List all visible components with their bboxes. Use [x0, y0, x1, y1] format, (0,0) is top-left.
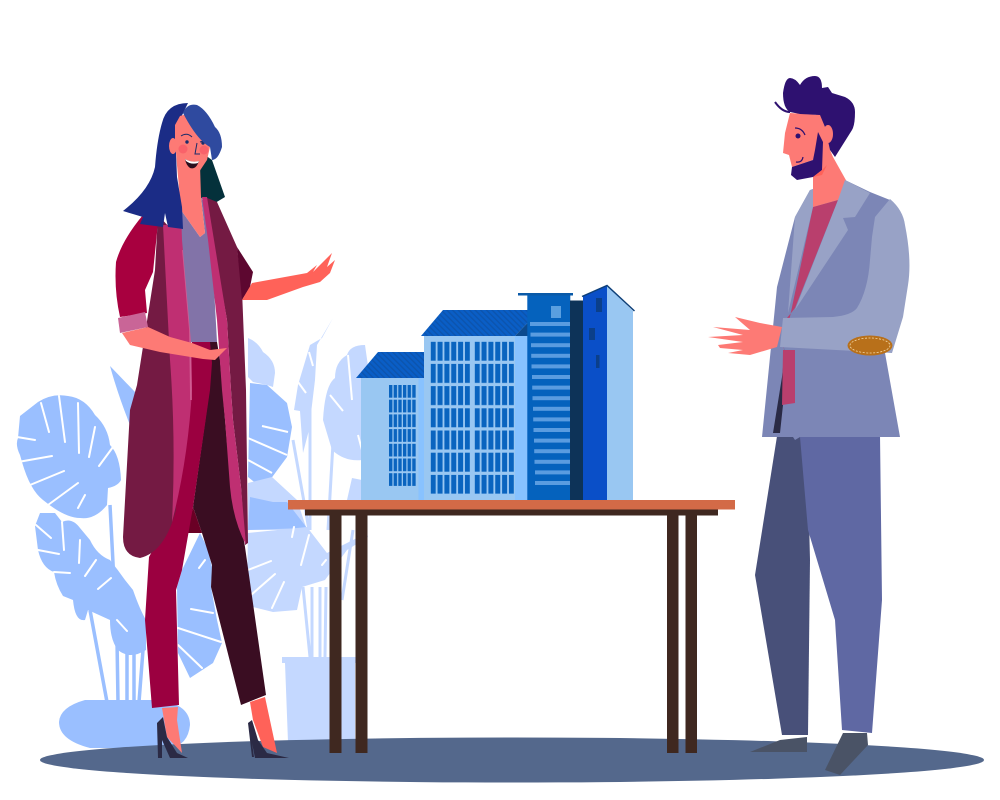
man right trouser leg	[800, 435, 882, 733]
table underside	[305, 509, 718, 516]
man left trouser leg	[755, 430, 810, 735]
plant pot: right	[282, 657, 356, 742]
middle building	[421, 310, 528, 500]
roof: middle building	[421, 310, 528, 336]
left plant	[17, 366, 222, 748]
dark recess	[570, 300, 583, 500]
mouth	[185, 159, 199, 168]
leaf: lower large	[247, 527, 368, 612]
blue tower	[518, 293, 576, 500]
left lapel	[788, 190, 813, 313]
front tower	[582, 286, 634, 500]
inner dark lining	[773, 348, 785, 433]
right coat panel	[205, 197, 248, 545]
front tower windows	[589, 298, 602, 368]
ear	[169, 138, 177, 154]
neck	[177, 165, 205, 237]
right lapel	[202, 197, 246, 545]
left sleeve	[116, 215, 158, 317]
left arm and hand	[122, 327, 227, 360]
leaf: tall banana	[294, 318, 333, 453]
left lapel	[163, 225, 192, 522]
sleeve	[780, 199, 909, 353]
eye	[795, 128, 805, 138]
right coat sleeve	[237, 247, 253, 300]
table top	[288, 500, 735, 510]
man	[708, 76, 909, 775]
leaf: monstera behind building	[323, 345, 370, 460]
windows: middle building	[431, 342, 514, 494]
beard	[791, 132, 823, 180]
roof: left building	[356, 352, 424, 378]
neck shadow	[813, 165, 827, 177]
left trouser leg	[145, 342, 212, 708]
stems: left plant	[90, 505, 143, 702]
hair	[783, 76, 855, 157]
right shoe	[248, 720, 289, 758]
plant pot: left	[59, 700, 190, 748]
face	[175, 113, 210, 178]
leaf: blue monstera	[248, 383, 292, 485]
right trouser leg	[193, 340, 266, 705]
building model	[356, 286, 634, 500]
sleeve cuff	[118, 312, 148, 333]
leaf: beside trousers	[177, 533, 222, 678]
hand	[708, 317, 782, 355]
elbow patch	[848, 336, 892, 356]
crotch shadow	[187, 507, 202, 533]
right plant	[247, 318, 370, 742]
right foot	[250, 697, 277, 753]
front hair	[183, 105, 222, 160]
leaf: darker pointed	[248, 497, 307, 530]
left foot	[162, 707, 182, 753]
leaf: pointed top	[110, 366, 135, 425]
ground ellipse	[40, 738, 984, 782]
man right shoe	[825, 733, 868, 775]
cheeks	[178, 144, 208, 154]
table	[288, 500, 735, 753]
tower balconies	[530, 322, 576, 485]
leaf: lower connector	[248, 477, 307, 530]
back hair	[198, 150, 225, 203]
face	[783, 113, 821, 167]
leaf: large monstera	[17, 395, 121, 518]
smile	[796, 157, 803, 162]
eyes	[185, 140, 205, 145]
stems: right plant	[293, 400, 353, 657]
left shoe	[157, 717, 188, 758]
hair	[123, 103, 188, 229]
man left shoe	[750, 737, 807, 752]
shirt	[782, 200, 838, 405]
neck	[813, 113, 847, 207]
woman	[116, 103, 335, 758]
leaf: upper lobes	[248, 338, 275, 387]
small left building	[356, 352, 424, 500]
ear	[823, 125, 833, 143]
top	[181, 197, 217, 342]
right lapel	[795, 180, 870, 310]
jacket body	[762, 180, 900, 440]
leaf: fragment behind table	[347, 478, 362, 500]
left coat panel	[123, 215, 176, 558]
table legs	[330, 515, 697, 753]
windows: left building	[389, 385, 416, 486]
right arm and hand	[242, 253, 335, 300]
leaf: lower monstera	[35, 513, 146, 655]
